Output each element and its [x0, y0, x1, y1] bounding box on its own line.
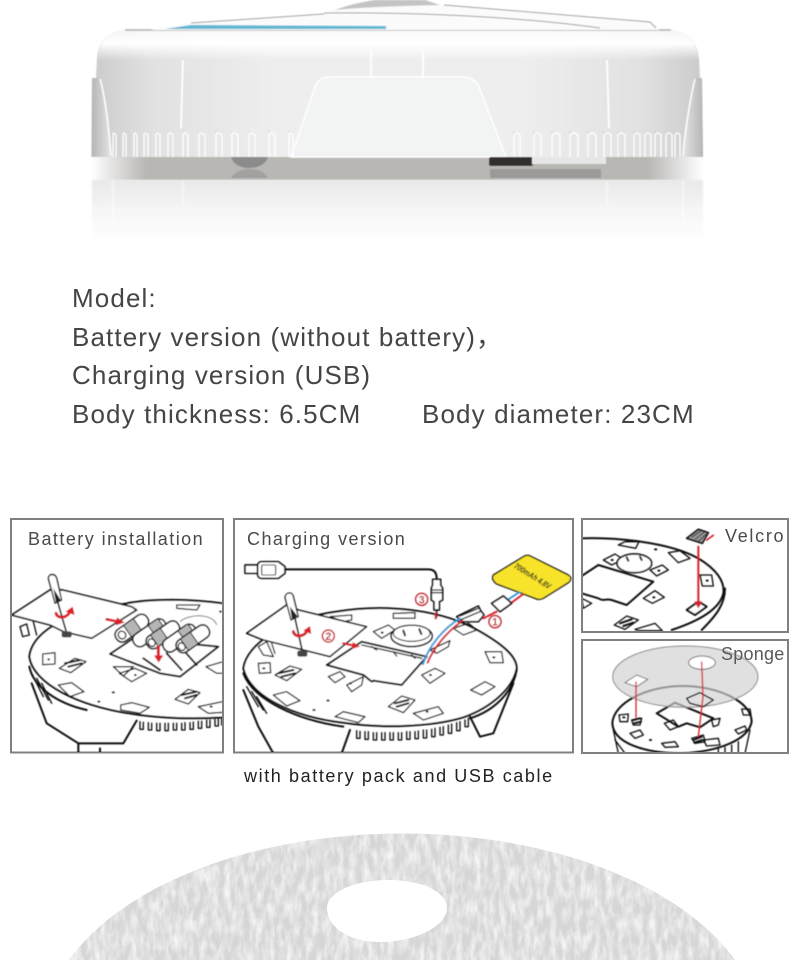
socket under sponge — [687, 693, 713, 707]
diagram: sponge placement — [612, 646, 758, 753]
hinge clip — [20, 622, 37, 637]
hinge clip — [258, 642, 275, 657]
disc outline — [29, 600, 233, 718]
panel: sponge — [582, 640, 788, 753]
red rotation arrow — [293, 630, 307, 636]
right side flare — [683, 78, 703, 157]
velcro pad — [687, 529, 708, 543]
pad dots — [612, 549, 708, 597]
red drop line — [695, 547, 701, 603]
skirt ribs — [32, 673, 52, 703]
panel heading: Battery installation — [28, 529, 204, 549]
felt disc — [69, 833, 735, 960]
diagram: charging connection — [243, 555, 571, 753]
battery wires red — [508, 594, 523, 605]
panel frame — [582, 640, 788, 753]
red arrow to compartment — [343, 643, 354, 646]
diagram: velcro placement — [582, 529, 725, 631]
bottom ribs right — [514, 131, 680, 157]
pad details — [48, 612, 221, 707]
pad details — [263, 633, 494, 712]
velcro label: Velcro — [725, 526, 785, 546]
panel: battery installation — [11, 519, 233, 753]
spec: battery version: Battery version (without battery)， — [72, 322, 503, 352]
socket top — [393, 625, 430, 641]
sponge pad photo — [69, 833, 735, 960]
panel: velcro — [582, 519, 788, 632]
red rotation arrowhead — [303, 626, 311, 634]
socket pins — [627, 557, 642, 561]
shell top highlight — [97, 30, 699, 60]
bottom slot dark part — [489, 157, 533, 166]
top cover — [150, 2, 660, 30]
battery connector — [492, 596, 512, 612]
battery compartment — [657, 703, 713, 727]
circled number 3: 3 — [419, 594, 425, 606]
red arrowhead down — [154, 655, 163, 663]
caption: with battery pack and USB cable — [243, 766, 554, 786]
battery cover plate — [12, 590, 137, 638]
robot cleaner side view photo — [91, 0, 703, 242]
shell rim line — [125, 29, 671, 31]
mount pads — [258, 613, 503, 723]
blue accent strip — [165, 25, 386, 29]
bottom slot light part — [532, 157, 606, 164]
red arrowhead — [352, 642, 360, 649]
DC jack — [431, 579, 443, 617]
vertical notches — [181, 50, 609, 128]
mount pads — [619, 709, 751, 747]
panel frame — [234, 519, 573, 752]
floor shadow band — [91, 157, 703, 180]
panel: charging version — [234, 519, 573, 753]
screw — [62, 631, 72, 637]
sponge velcro cutout — [625, 675, 648, 687]
velcro dots — [623, 717, 702, 743]
red charging port mark — [433, 613, 439, 619]
target pad — [687, 602, 707, 615]
red dashed link — [483, 612, 497, 618]
centre hole — [327, 880, 447, 942]
socket dome — [617, 554, 652, 573]
sponge label: Sponge — [721, 644, 785, 664]
spec: body diameter: Body diameter: 23CM — [422, 399, 695, 429]
spec: charging version: Charging version (USB) — [72, 360, 371, 390]
red arrowhead right — [116, 617, 125, 625]
specification text block — [72, 283, 695, 429]
bottom pads — [582, 598, 638, 629]
front wheel — [231, 157, 268, 168]
red rotation arrow — [56, 611, 70, 617]
robot body shell — [92, 30, 703, 157]
spec: body thickness: Body thickness: 6.5CM — [72, 399, 361, 429]
disc rim — [612, 686, 752, 753]
velcro stripes — [692, 531, 706, 541]
circled number 3 — [416, 593, 428, 606]
top cover dome — [335, 0, 440, 10]
batteries — [113, 612, 217, 655]
disc outline — [243, 608, 517, 726]
centre trapezoid panel — [291, 77, 506, 157]
flare highlights — [100, 79, 695, 156]
skirt — [613, 730, 750, 753]
red arrow down — [156, 644, 160, 656]
circled number 1 — [489, 616, 501, 629]
battery compartment — [110, 638, 218, 677]
bottom teeth — [140, 719, 222, 731]
disc outline — [582, 538, 724, 630]
red arrow to compartment — [107, 619, 118, 622]
circled number 2 — [322, 630, 334, 643]
battery cover plate — [247, 605, 367, 657]
circled number 1: 1 — [492, 617, 498, 629]
socket connector — [457, 606, 484, 622]
red guide lines — [636, 662, 703, 737]
top cover contour lines — [191, 5, 656, 28]
screw — [297, 651, 307, 657]
battery compartment — [582, 565, 653, 605]
panel frame — [11, 519, 223, 752]
yellow battery pack — [493, 555, 571, 599]
compartment inner line — [362, 645, 422, 658]
bottom teeth — [357, 718, 468, 740]
disc outer rim — [702, 588, 725, 630]
sponge centre hole — [689, 656, 715, 669]
disc rim and skirt — [243, 670, 517, 753]
red rotation arrowhead — [66, 607, 75, 615]
small red arrow — [707, 535, 713, 540]
slot reflection — [490, 169, 601, 178]
wheel reflection — [231, 169, 268, 178]
socket pins — [403, 629, 421, 635]
floor reflection — [92, 180, 703, 242]
circled number 2: 2 — [325, 631, 331, 643]
left side flare — [92, 78, 111, 157]
mount pads — [603, 542, 713, 631]
diagram: disc with batteries — [12, 575, 233, 753]
connector detail — [460, 608, 480, 619]
compartment red wire — [427, 621, 463, 663]
battery pack label: 700mAh 4.8V — [512, 561, 554, 592]
bottom ribs left — [113, 131, 293, 157]
spec: model: Model: — [72, 283, 157, 313]
socket dome — [391, 625, 432, 647]
mount pads — [43, 605, 233, 713]
battery compartment — [327, 642, 427, 685]
screwdriver — [57, 598, 67, 633]
USB cable — [285, 569, 437, 578]
red arrowhead — [694, 602, 702, 608]
rim ribs — [247, 687, 267, 713]
panel frame — [582, 519, 788, 632]
compartment blue wire — [423, 618, 460, 665]
battery wires — [505, 592, 520, 602]
panel heading: Charging version — [247, 529, 406, 549]
sponge disc — [613, 646, 758, 707]
screwdriver — [295, 618, 303, 653]
skirt — [29, 667, 137, 753]
USB plug — [245, 562, 285, 578]
